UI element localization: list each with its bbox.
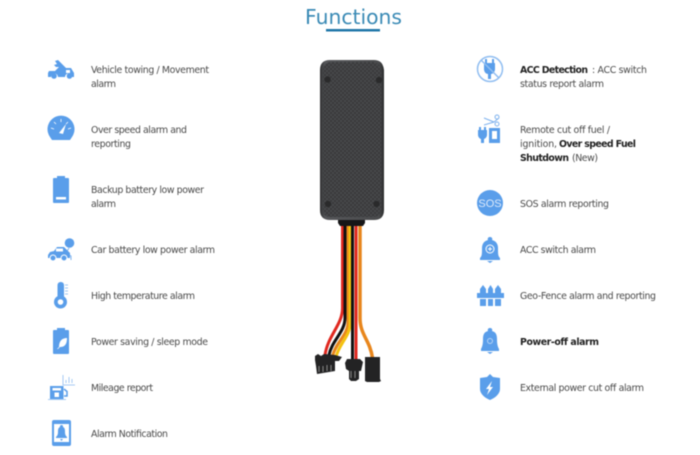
icon: power saving battery [53, 328, 69, 354]
icon: remote cut off [478, 115, 500, 143]
text: ACC detection: status report alarm [520, 79, 604, 90]
icon: ACC detection no plug [478, 56, 502, 82]
text: ACC switch: ACC switch alarm [520, 245, 596, 256]
text: alarm notification: Alarm Notification [91, 429, 168, 440]
text: SOS: SOS alarm reporting [520, 199, 609, 210]
icon: SOS: SOS [478, 198, 502, 210]
text: over speed: Over speed alarm and [91, 125, 187, 136]
panel: right features [477, 56, 656, 400]
icon: backup battery [53, 176, 69, 203]
text: over speed: reporting [91, 139, 131, 150]
title: Functions [305, 5, 402, 29]
text: ACC detection: ACC Detection [520, 65, 588, 76]
text: external power: External power cut off alarm [520, 383, 644, 394]
text: remote cut off: (New) [572, 153, 598, 164]
illustration: GPS tracker device [315, 60, 384, 382]
text: backup battery: alarm [91, 199, 116, 210]
device body [320, 60, 384, 220]
text: remote cut off: Over speed Fuel [559, 139, 636, 150]
text: vehicle towing: Vehicle towing / Movement [91, 65, 209, 76]
text: mileage: Mileage report [91, 383, 153, 394]
text: power saving: Power saving / sleep mode [91, 337, 208, 348]
icon: car battery [48, 238, 74, 261]
icon: bell power [481, 328, 499, 354]
icon: SOS [477, 190, 503, 216]
text: remote cut off: ignition, [520, 139, 557, 150]
text: backup battery: Backup battery low power [91, 185, 204, 196]
icon: phone alarm notification [52, 420, 71, 446]
text: remote cut off: Shutdown [520, 153, 569, 164]
text: remote cut off: Remote cut off fuel / [520, 125, 611, 136]
icon: thermometer [54, 282, 68, 308]
panel: left features [48, 60, 215, 446]
icon: mileage report [48, 375, 75, 400]
icon: bell with plus [480, 237, 500, 263]
text: high temperature: High temperature alarm [91, 291, 195, 302]
icon: tow truck [48, 60, 74, 79]
wires [325, 225, 372, 360]
icon: fence [477, 285, 504, 306]
connectors [315, 354, 381, 382]
text: power-off: Power-off alarm [520, 337, 599, 348]
text: vehicle towing: alarm [91, 79, 116, 90]
icon: shield [480, 374, 500, 400]
text: car battery: Car battery low power alarm [91, 245, 215, 256]
icon: speedometer [48, 116, 74, 140]
text: ACC detection: : ACC switch [592, 65, 647, 76]
collar [338, 216, 365, 226]
text: geo-fence: Geo-Fence alarm and reporting [520, 291, 656, 302]
